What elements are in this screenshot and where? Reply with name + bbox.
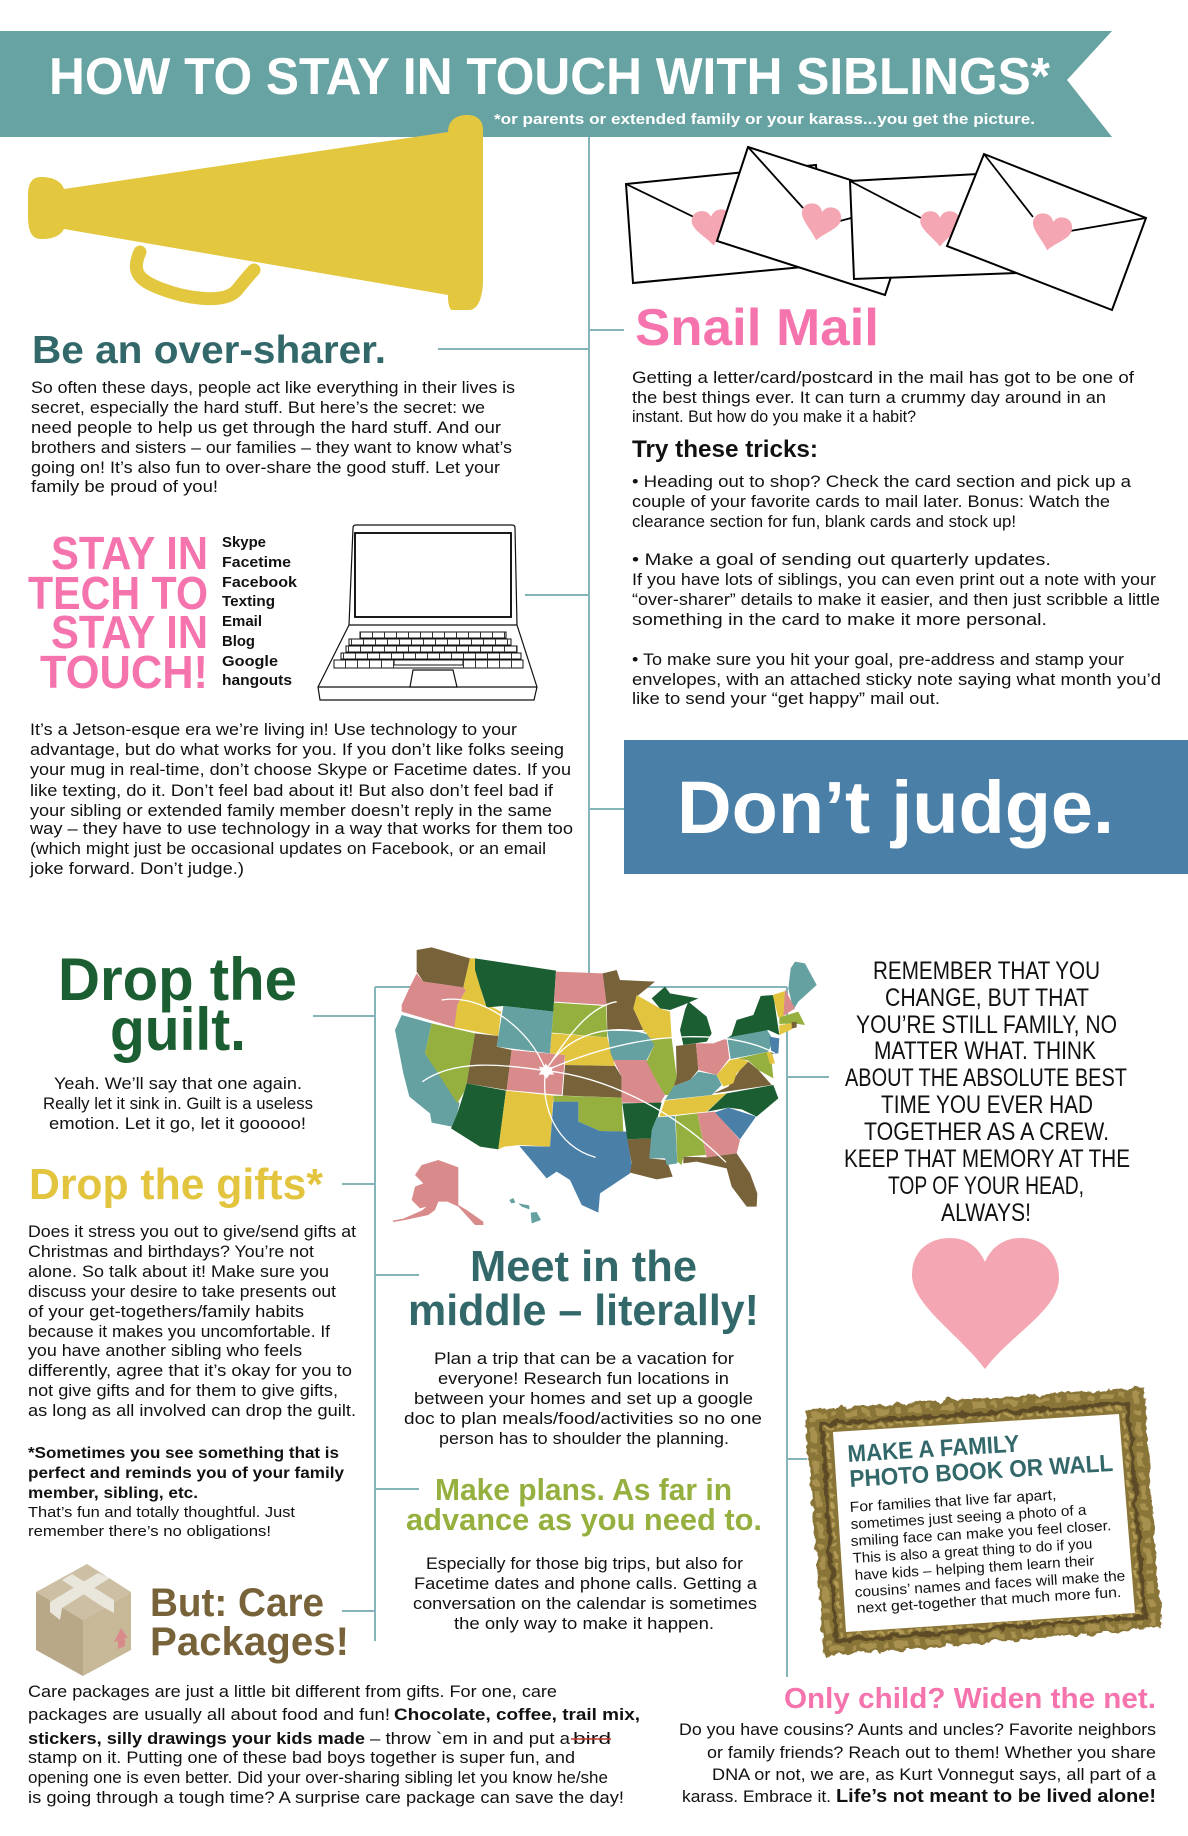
- text: tech body: (which might just be occasional updates on Facebook, or an email: [30, 840, 546, 858]
- panel: don't judge: Don’t judge.: [677, 766, 1114, 849]
- icon: big heart: [912, 1238, 1059, 1369]
- text: tricks list: something in the card to make it more personal.: [632, 611, 1047, 629]
- text: guilt body: Really let it sink in. Guilt is a useless: [43, 1095, 313, 1113]
- text: photo book body: For families that live far apart,: [849, 1487, 1057, 1516]
- text: gifts footnote: perfect and reminds you of your family: [28, 1465, 344, 1482]
- text: photo book body: have kids – helping them learn their: [854, 1553, 1095, 1584]
- text: snail mail intro: [632, 369, 1134, 426]
- text: meet body: between your homes and set up a google: [414, 1390, 753, 1408]
- text: tricks list: If you have lots of siblings, you can even print out a note with your: [632, 571, 1157, 589]
- text: gifts body: Christmas and birthdays? You’re not: [28, 1243, 314, 1261]
- text: meet body: [404, 1350, 762, 1448]
- text: over-sharer body: family be proud of you!: [31, 478, 218, 496]
- text: photo book body: [849, 1487, 1126, 1617]
- text: care packages body: stamp on it. Putting one of these bad boys together is super fun, and: [28, 1749, 575, 1767]
- heading: stay in tech: [28, 527, 208, 698]
- text: remember callout: ABOUT THE ABSOLUTE BEST: [845, 1064, 1127, 1092]
- text: over-sharer body: So often these days, people act like everything in their lives is: [31, 379, 515, 397]
- text: gifts footnote: member, sibling, etc.: [28, 1485, 198, 1502]
- icon: megaphone: [28, 115, 483, 310]
- heading: snail mail: Snail Mail: [635, 299, 879, 357]
- icon: cardboard box: [36, 1564, 131, 1676]
- heading: only child: Only child? Widen the net.: [784, 1683, 1156, 1715]
- text: meet body: everyone! Research fun locations in: [438, 1370, 729, 1388]
- text: remember callout: TOP OF YOUR HEAD,: [888, 1172, 1084, 1200]
- text: remember callout: TOGETHER AS A CREW.: [864, 1118, 1109, 1146]
- heading: drop the gifts: Drop the gifts*: [29, 1160, 324, 1209]
- heading: make plans: [406, 1472, 762, 1537]
- heading: family photo book: [847, 1431, 1114, 1493]
- subtitle: *or parents or extended family or your karass...you get the picture.: [494, 111, 1035, 128]
- heading: be an over-sharer: Be an over-sharer.: [32, 329, 386, 372]
- text: tricks list: like to send your “get happy” mail out.: [632, 690, 940, 708]
- heading: try these tricks: Try these tricks:: [632, 436, 818, 463]
- text: remember callout: KEEP THAT MEMORY AT THE: [844, 1145, 1130, 1173]
- text: snail mail intro: the best things ever. It can turn a crummy day around in an: [632, 389, 1106, 407]
- heading: make plans: Make plans. As far in: [435, 1472, 732, 1507]
- text: plans body: [413, 1555, 758, 1633]
- text: photo book body: smiling face can make you feel closer.: [850, 1518, 1112, 1550]
- text: only child body: Life’s not meant to be lived alone!: [836, 1786, 1156, 1806]
- heading: meet in the middle: middle – literally!: [408, 1286, 759, 1335]
- text: tech body: It’s a Jetson-esque era we’re living in! Use technology to your: [30, 721, 518, 739]
- icon: laptop: [318, 525, 537, 700]
- text: remember callout: MATTER WHAT. THINK: [874, 1037, 1096, 1065]
- text: care packages body: packages are usually all about food and fun!: [28, 1706, 390, 1724]
- text: plans body: conversation on the calendar is sometimes: [413, 1595, 757, 1613]
- text: plans body: Especially for those big trips, but also for: [426, 1555, 744, 1573]
- text: photo book body: cousins’ names and faces will make the: [854, 1568, 1126, 1601]
- text: remember callout: TIME YOU EVER HAD: [881, 1091, 1093, 1119]
- text: tech body: [29, 721, 573, 878]
- text: only child body: karass. Embrace it.: [682, 1788, 831, 1806]
- panel: don't judge: [624, 740, 1188, 874]
- text: over-sharer body: brothers and sisters – our families – they want to know what’s: [31, 439, 512, 457]
- text: remember callout: CHANGE, BUT THAT: [885, 984, 1089, 1012]
- text: gifts body: differently, agree that it’s okay for you to: [28, 1362, 352, 1380]
- text: only child body: [679, 1721, 1157, 1806]
- list: tech options: Google: [222, 654, 278, 670]
- icon: envelopes with hearts: [626, 147, 1146, 310]
- text: over-sharer body: [31, 379, 515, 496]
- list: tech options: hangouts: [222, 673, 292, 689]
- text: care packages body: bird: [573, 1730, 611, 1748]
- heading: care packages: [150, 1581, 349, 1664]
- heading: drop the guilt: Drop the: [58, 946, 297, 1013]
- text: care packages body: opening one is even better. Did your over-sharing sibling let you know he/she: [28, 1769, 608, 1787]
- text: gifts footnote: [28, 1445, 344, 1540]
- heading: stay in tech: TECH TO: [28, 567, 208, 619]
- text: tricks list: envelopes, with an attached sticky note saying what month you’d: [632, 671, 1161, 689]
- text: over-sharer body: secret, especially the hard stuff. But here’s the secret: we: [31, 399, 485, 417]
- text: tech body: like texting, do it. Don’t feel bad about it! But also don’t feel bad if: [30, 782, 553, 800]
- text: gifts body: you have another sibling who feels: [28, 1342, 302, 1360]
- text: gifts body: alone. So talk about it! Make sure you: [28, 1263, 329, 1281]
- text: tech body: your mug in real-time, don’t choose Skype or Facetime dates. If you: [30, 761, 571, 779]
- text: guilt body: Yeah. We’ll say that one again.: [54, 1075, 302, 1093]
- text: gifts body: because it makes you uncomfortable. If: [28, 1323, 330, 1341]
- text: over-sharer body: need people to help us get through the hard stuff. And our: [31, 419, 502, 437]
- heading: drop the guilt: guilt.: [110, 996, 246, 1063]
- text: photo book body: This is also a great thing to do if you: [852, 1536, 1093, 1567]
- text: care packages body: [28, 1683, 640, 1807]
- heading: stay in tech: STAY IN: [51, 606, 208, 658]
- map: united states: [393, 947, 817, 1225]
- text: gifts body: as long as all involved can drop the guilt.: [28, 1402, 356, 1420]
- list: tech options: Facetime: [222, 555, 291, 571]
- text: gifts footnote: remember there’s no obligations!: [28, 1523, 271, 1540]
- text: photo book body: sometimes just seeing a photo of a: [850, 1503, 1088, 1533]
- connector lines: [313, 137, 829, 1677]
- text: tricks list: • Heading out to shop? Check the card section and pick up a: [632, 473, 1132, 491]
- text: tricks list: [632, 473, 1161, 708]
- text: only child body: or family friends? Reach out to them! Whether you share: [707, 1744, 1156, 1762]
- text: snail mail intro: instant. But how do you make it a habit?: [632, 408, 916, 426]
- heading: care packages: Packages!: [150, 1620, 349, 1664]
- text: gifts footnote: *Sometimes you see something that is: [28, 1445, 339, 1462]
- text: photo book body: next get-together that much more fun.: [856, 1585, 1122, 1617]
- heading: drop the guilt: [58, 946, 297, 1063]
- text: only child body: Do you have cousins? Aunts and uncles? Favorite neighbors: [679, 1721, 1156, 1739]
- text: remember callout: ALWAYS!: [941, 1199, 1031, 1227]
- list: tech options: Skype: [222, 535, 266, 551]
- text: tricks list: couple of your favorite cards to mail later. Bonus: Watch the: [632, 493, 1110, 511]
- text: meet body: person has to shoulder the planning.: [439, 1430, 729, 1448]
- text: care packages body: Chocolate, coffee, trail mix,: [394, 1706, 640, 1724]
- heading: make plans: advance as you need to.: [406, 1502, 762, 1537]
- list: tech options: [222, 535, 298, 689]
- text: guilt body: emotion. Let it go, let it gooooo!: [49, 1115, 306, 1133]
- text: plans body: the only way to make it happen.: [454, 1615, 714, 1633]
- text: tricks list: • Make a goal of sending out quarterly updates.: [632, 551, 1051, 569]
- text: gifts footnote: That’s fun and totally thoughtful. Just: [28, 1504, 296, 1521]
- heading: care packages: But: Care: [150, 1581, 324, 1625]
- text: care packages body: stickers, silly drawings your kids made: [28, 1730, 365, 1748]
- text: tech body: advantage, but do what works for you. If you don’t like folks seeing: [30, 741, 564, 759]
- list: tech options: Blog: [222, 634, 255, 650]
- list: tech options: Email: [222, 614, 262, 630]
- text: meet body: doc to plan meals/food/activities so no one: [404, 1410, 762, 1428]
- text: tech body: joke forward. Don’t judge.): [29, 860, 244, 878]
- heading: meet in the middle: Meet in the: [470, 1242, 697, 1291]
- title: HOW TO STAY IN TOUCH WITH SIBLINGS*: [49, 48, 1051, 106]
- panel: gold picture frame: [805, 1387, 1161, 1656]
- text: gifts body: [28, 1223, 356, 1420]
- text: remember callout: REMEMBER THAT YOU: [873, 957, 1100, 985]
- heading: stay in tech: STAY IN: [51, 527, 208, 579]
- text: over-sharer body: going on! It’s also fun to over-share the good stuff. Let your: [31, 459, 501, 477]
- text: gifts body: not give gifts and for them to give gifts,: [28, 1382, 338, 1400]
- heading: meet in the middle: [408, 1242, 759, 1335]
- heading: family photo book: PHOTO BOOK OR WALL: [849, 1450, 1114, 1493]
- text: care packages body: – throw `em in and put a: [370, 1730, 571, 1748]
- heading: family photo book: MAKE A FAMILY: [847, 1431, 1020, 1468]
- text: tricks list: “over-sharer” details to make it easier, and then just scribble a little: [632, 591, 1160, 609]
- text: gifts body: Does it stress you out to give/send gifts at: [28, 1223, 356, 1241]
- text: snail mail intro: Getting a letter/card/postcard in the mail has got to be one of: [632, 369, 1134, 387]
- text: plans body: Facetime dates and phone calls. Getting a: [414, 1575, 758, 1593]
- list: tech options: Facebook: [222, 575, 298, 591]
- text: remember callout: YOU’RE STILL FAMILY, NO: [856, 1011, 1117, 1039]
- text: care packages body: is going through a tough time? A surprise care package can save the day!: [28, 1789, 624, 1807]
- text: care packages body: Care packages are just a little bit different from gifts. For one, care: [28, 1683, 557, 1701]
- title banner: [0, 31, 1112, 137]
- list: tech options: Texting: [222, 594, 275, 610]
- heading: stay in tech: TOUCH!: [40, 646, 208, 698]
- text: remember callout: [844, 957, 1130, 1227]
- text: gifts body: of your get-togethers/family habits: [28, 1303, 304, 1321]
- text: only child body: DNA or not, we are, as Kurt Vonnegut says, all part of a: [712, 1766, 1157, 1784]
- text: tricks list: • To make sure you hit your goal, pre-address and stamp your: [632, 651, 1125, 669]
- text: gifts body: discuss your desire to take presents out: [28, 1283, 336, 1301]
- text: tricks list: clearance section for fun, blank cards and stock up!: [632, 513, 1016, 531]
- text: meet body: Plan a trip that can be a vacation for: [434, 1350, 735, 1368]
- text: tech body: your sibling or extended family member doesn’t reply in the same: [30, 802, 552, 820]
- text: tech body: way – they have to use technology in a way that works for them too: [29, 820, 573, 838]
- text: guilt body: [43, 1075, 313, 1133]
